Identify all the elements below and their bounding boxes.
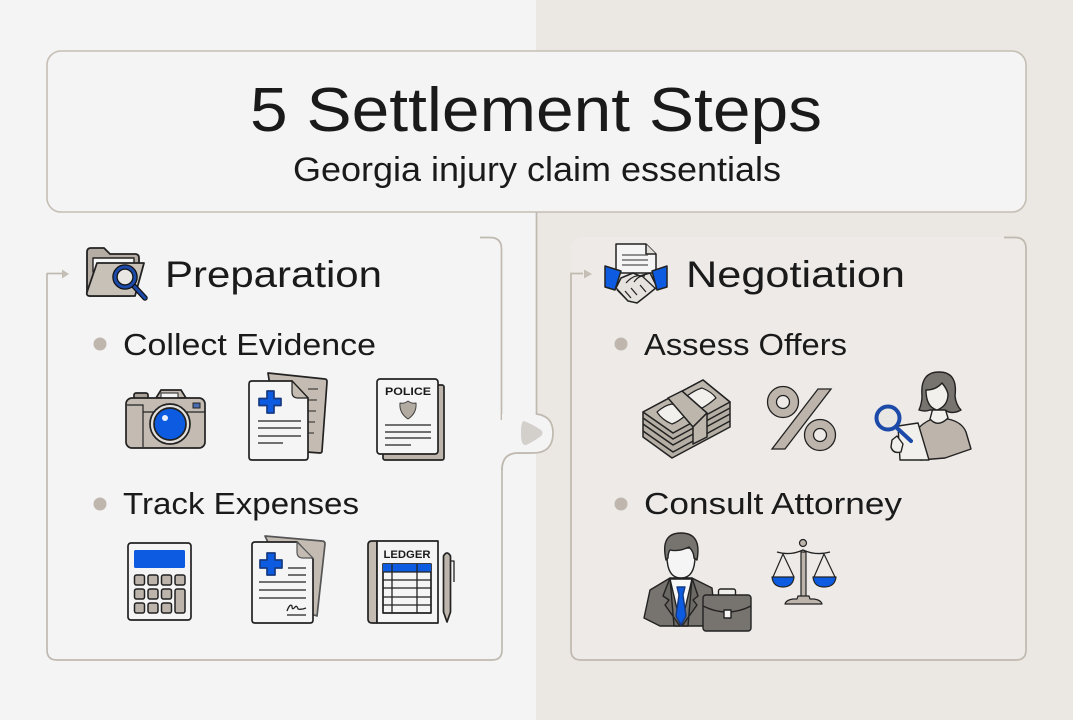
panel: negotiation background	[571, 237, 1026, 660]
bullet: assess offers	[614, 338, 628, 350]
icon: woman with magnifier	[876, 372, 971, 460]
icon: police report	[377, 379, 444, 460]
icon: signed medical bill	[252, 536, 325, 623]
icon: medical record	[249, 373, 327, 460]
icon: attorney with briefcase	[644, 533, 751, 631]
panel: title	[47, 51, 1026, 212]
icon: scales of justice	[772, 540, 836, 604]
subheading: collect evidence: Collect Evidence	[123, 327, 376, 362]
panel: preparation outline	[47, 238, 530, 660]
bullet: consult attorney	[614, 498, 628, 510]
icon: handshake and document	[605, 244, 667, 303]
icon: folder with magnifier	[87, 248, 145, 298]
icon: percent	[768, 386, 836, 450]
arrow: preparation start	[62, 270, 69, 278]
icon: ledger and pen: LEDGER	[384, 549, 431, 561]
connector: arrow between panels	[502, 212, 553, 470]
subheading: consult attorney: Consult Attorney	[644, 486, 903, 521]
bullet: collect evidence	[94, 338, 106, 350]
icon: stack of cash	[643, 380, 730, 458]
icon: camera	[126, 390, 205, 448]
subtitle: Georgia injury claim essentials	[293, 151, 781, 189]
icon: police report: POLICE	[385, 386, 431, 398]
subheading: assess offers: Assess Offers	[644, 327, 847, 362]
heading: preparation: Preparation	[165, 254, 382, 295]
icon: ledger and pen	[368, 541, 454, 623]
heading: negotiation: Negotiation	[686, 254, 905, 295]
panel: negotiation outline	[571, 238, 1026, 660]
icon: calculator	[128, 543, 191, 620]
arrow: negotiation start	[584, 270, 592, 278]
title: 5 Settlement Steps	[250, 76, 822, 145]
subheading: track expenses: Track Expenses	[123, 486, 359, 521]
bullet: track expenses	[94, 498, 106, 510]
